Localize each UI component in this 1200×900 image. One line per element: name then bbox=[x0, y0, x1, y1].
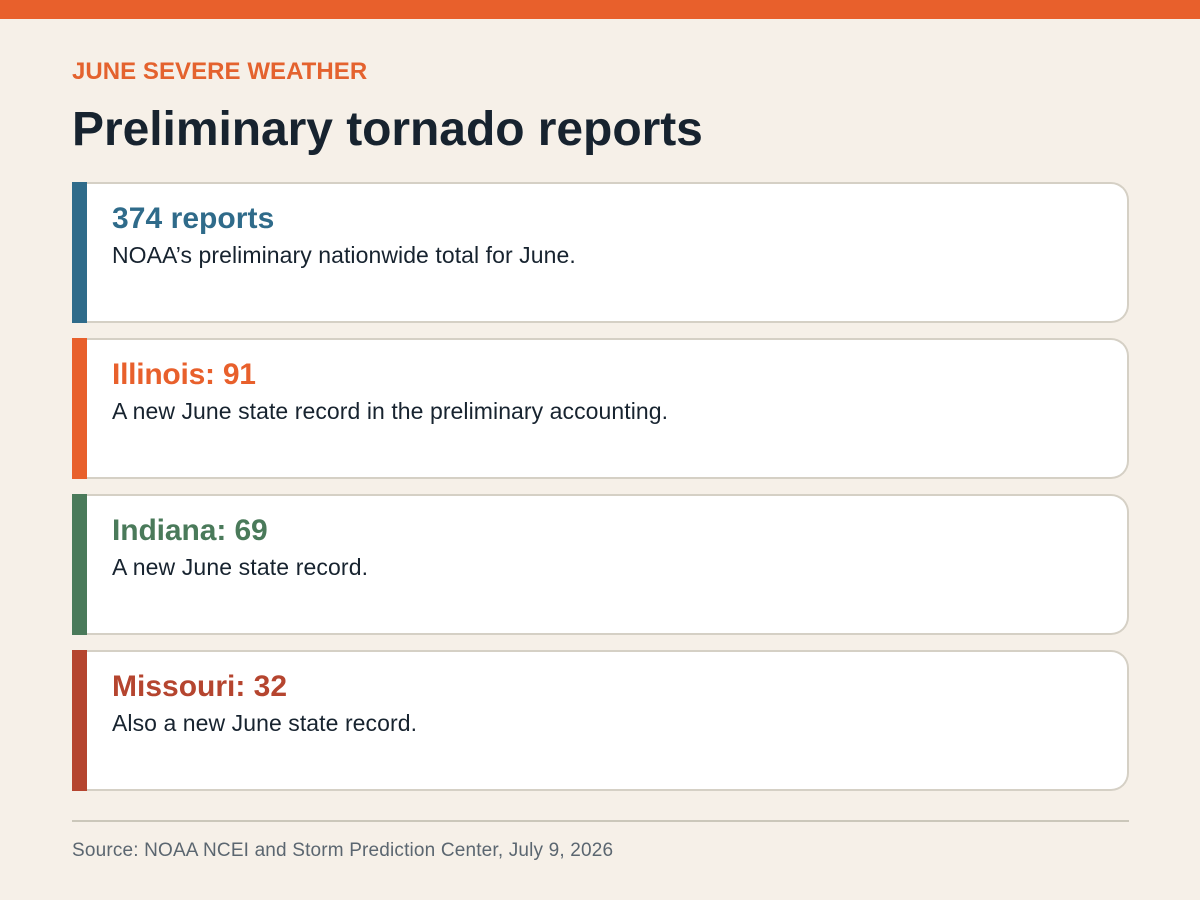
stat: 374 reports: 374 reports bbox=[112, 202, 274, 235]
accent bar: green bbox=[72, 494, 87, 635]
accent bar: orange bbox=[72, 338, 87, 479]
stat: Indiana 69: Indiana: 69 bbox=[112, 514, 268, 547]
panel: Missouri bbox=[72, 650, 1129, 791]
panel: national total bbox=[72, 182, 1129, 323]
description: national total: NOAA’s preliminary nationwide total for June. bbox=[112, 242, 576, 268]
accent bar: blue bbox=[72, 182, 87, 323]
title: Preliminary tornado reports bbox=[72, 103, 703, 156]
panel: Indiana bbox=[72, 494, 1129, 635]
eyebrow heading: JUNE SEVERE WEATHER bbox=[72, 58, 367, 85]
stat: Illinois 91: Illinois: 91 bbox=[112, 358, 256, 391]
description: Indiana: A new June state record. bbox=[112, 554, 368, 580]
description: Illinois: A new June state record in the preliminary accounting. bbox=[112, 398, 668, 424]
accent bar: red bbox=[72, 650, 87, 791]
description: Missouri: Also a new June state record. bbox=[112, 710, 417, 736]
source note: Source: NOAA NCEI and Storm Prediction Center, July 9, 2026 bbox=[72, 840, 613, 861]
stat: Missouri 32: Missouri: 32 bbox=[112, 670, 287, 703]
top accent band bbox=[0, 0, 1200, 19]
panel: Illinois bbox=[72, 338, 1129, 479]
